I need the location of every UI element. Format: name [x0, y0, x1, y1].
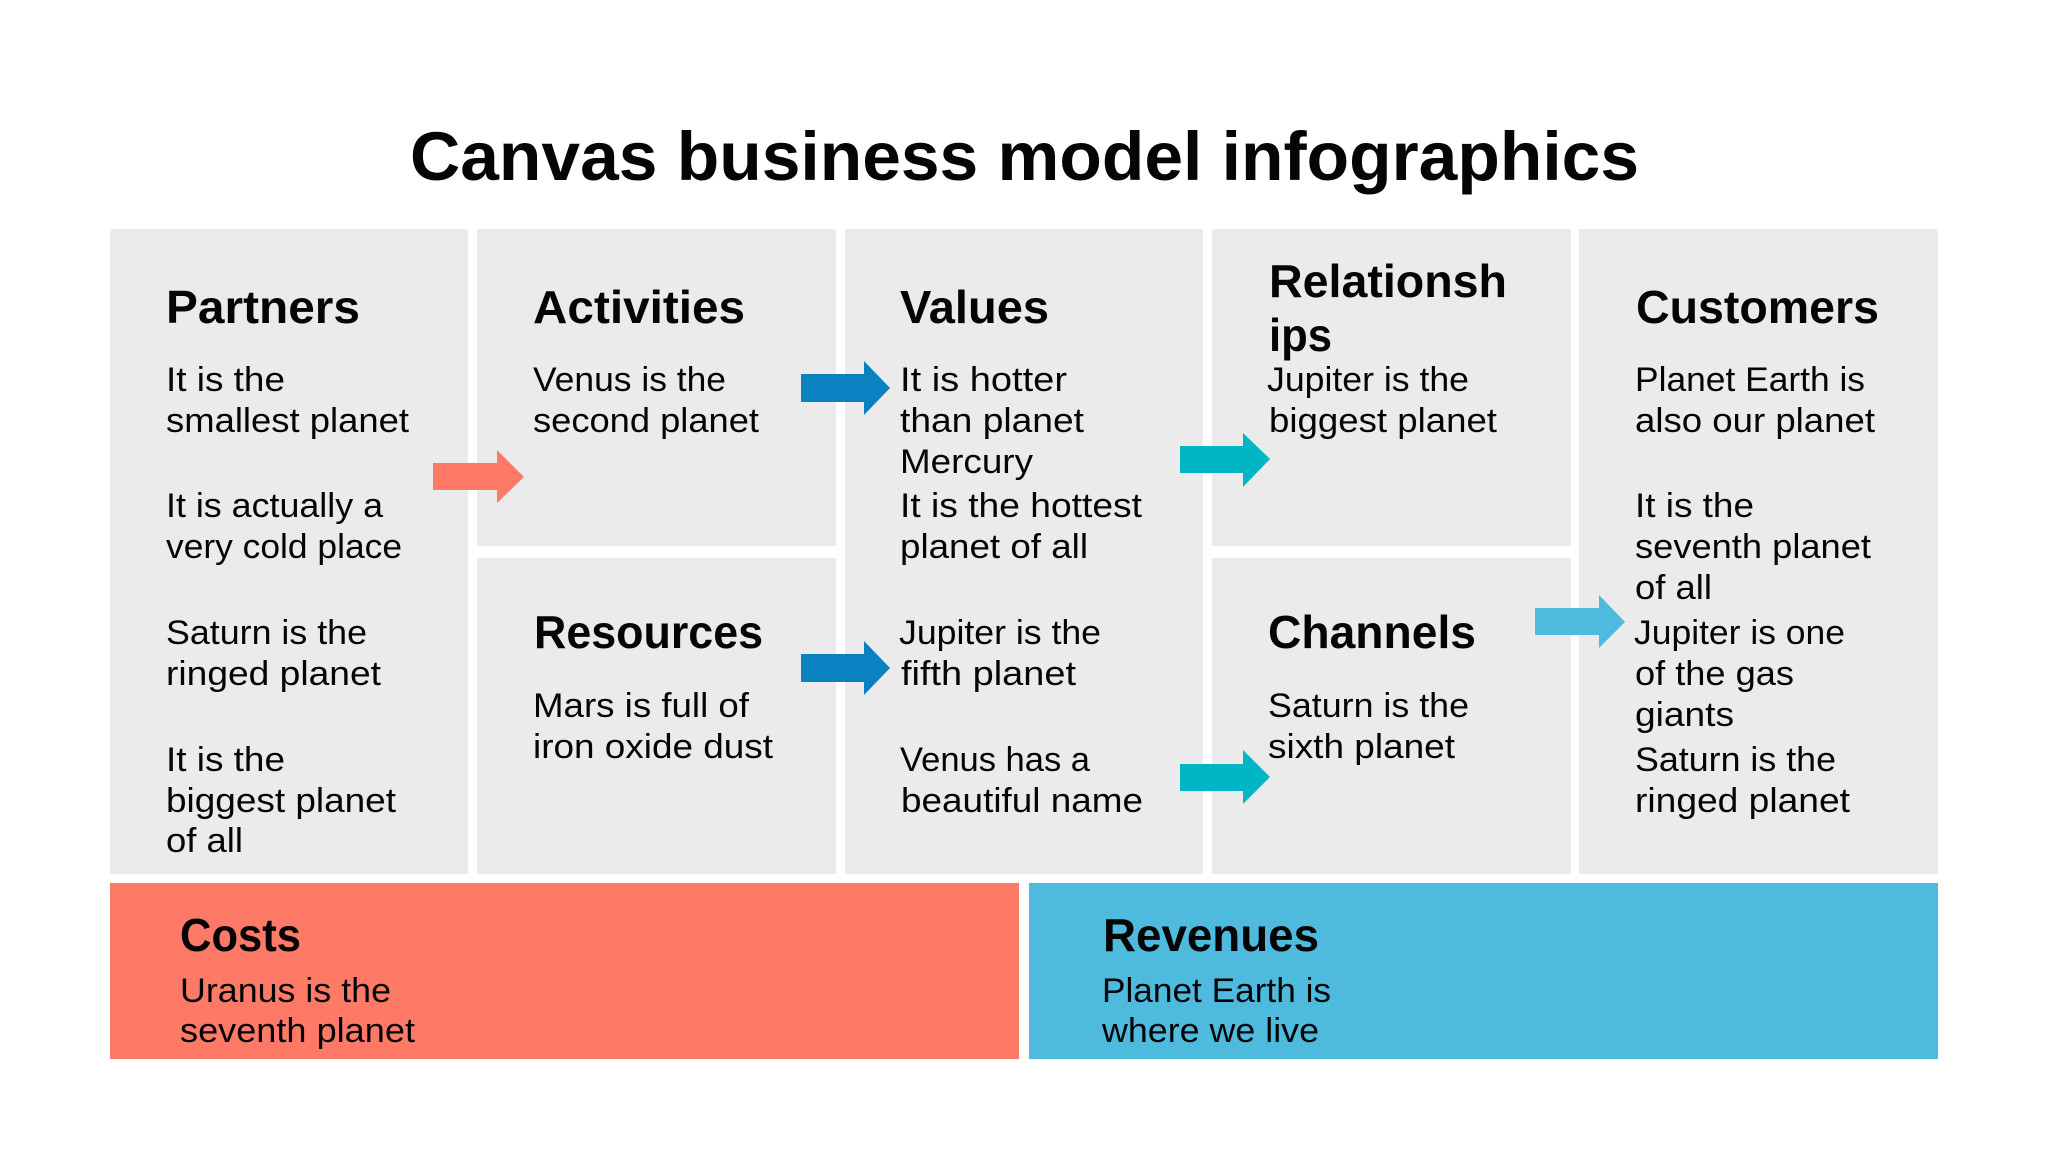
panel: revenues — [1029, 883, 1938, 1059]
panel: customers: seventh planet — [1635, 528, 1872, 566]
panel: revenues: where we live — [1101, 1012, 1319, 1050]
arrow: channels to customers — [1535, 595, 1625, 648]
panel: partners: very cold place — [166, 528, 402, 566]
panel: values: Values — [900, 281, 1049, 333]
arrow: values to channels — [1180, 750, 1270, 804]
panel: relationships: Jupiter is the — [1267, 361, 1469, 399]
panel: relationships — [1212, 229, 1571, 546]
title: Canvas business model infographics — [410, 118, 1639, 195]
panel: resources: Mars is full of — [533, 687, 750, 725]
panel: resources — [477, 558, 836, 874]
panel: costs: Costs — [180, 909, 301, 961]
panel: customers: giants — [1635, 696, 1734, 734]
panel: relationships: ips — [1269, 309, 1332, 361]
panel: revenues: Planet Earth is — [1102, 972, 1331, 1010]
arrow: activities to values — [801, 361, 890, 415]
panel: customers: of all — [1635, 569, 1712, 607]
panel: values: It is hotter — [900, 361, 1067, 399]
panel: partners: ringed planet — [166, 655, 382, 693]
panel: values: fifth planet — [901, 655, 1077, 693]
panel: activities: Venus is the — [533, 361, 726, 399]
panel: costs — [110, 883, 1019, 1059]
panel: customers: Planet Earth is — [1635, 361, 1865, 399]
panel: values — [845, 229, 1203, 874]
panel: values: Venus has a — [900, 741, 1090, 779]
arrow: partners to activities — [433, 450, 524, 503]
panel: costs: seventh planet — [180, 1012, 416, 1050]
panel: partners: It is the — [166, 741, 285, 779]
panel: customers: ringed planet — [1635, 782, 1851, 820]
panel: values: than planet — [900, 402, 1085, 440]
arrow: resources to values — [801, 641, 890, 695]
panel: relationships: biggest planet — [1269, 402, 1498, 440]
panel: customers: Saturn is the — [1635, 741, 1836, 779]
arrow: values to relationships — [1180, 433, 1270, 487]
panel: partners — [110, 229, 468, 874]
panel: channels: Channels — [1268, 606, 1476, 658]
panel: costs: Uranus is the — [180, 972, 391, 1010]
panel: relationships: Relationsh — [1269, 255, 1507, 307]
panel: values: Mercury — [900, 443, 1033, 481]
panel: customers: of the gas — [1635, 655, 1794, 693]
panel: resources: Resources — [534, 606, 763, 658]
panel: values: planet of all — [900, 528, 1088, 566]
panel: channels: Saturn is the — [1268, 687, 1469, 725]
panel: channels — [1212, 558, 1571, 874]
panel: values: Jupiter is the — [899, 614, 1101, 652]
panel: activities: second planet — [533, 402, 760, 440]
panel: channels: sixth planet — [1268, 728, 1456, 766]
panel: partners: Saturn is the — [166, 614, 367, 652]
panel: customers: also our planet — [1635, 402, 1876, 440]
panel: partners: It is actually a — [166, 487, 383, 525]
panel: revenues: Revenues — [1103, 909, 1319, 961]
panel: values: It is the hottest — [900, 487, 1143, 525]
panel: partners: of all — [166, 822, 243, 860]
panel: activities — [477, 229, 836, 546]
panel: customers: Jupiter is one — [1634, 614, 1845, 652]
panel: partners: It is the — [166, 361, 285, 399]
panel: customers: It is the — [1635, 487, 1754, 525]
panel: values: beautiful name — [901, 782, 1143, 820]
panel: partners: biggest planet — [166, 782, 397, 820]
panel: customers — [1579, 229, 1938, 874]
panel: customers: Customers — [1636, 281, 1879, 333]
panel: partners: Partners — [166, 281, 360, 333]
panel: partners: smallest planet — [166, 402, 410, 440]
panel: activities: Activities — [533, 281, 745, 333]
panel: resources: iron oxide dust — [533, 728, 774, 766]
